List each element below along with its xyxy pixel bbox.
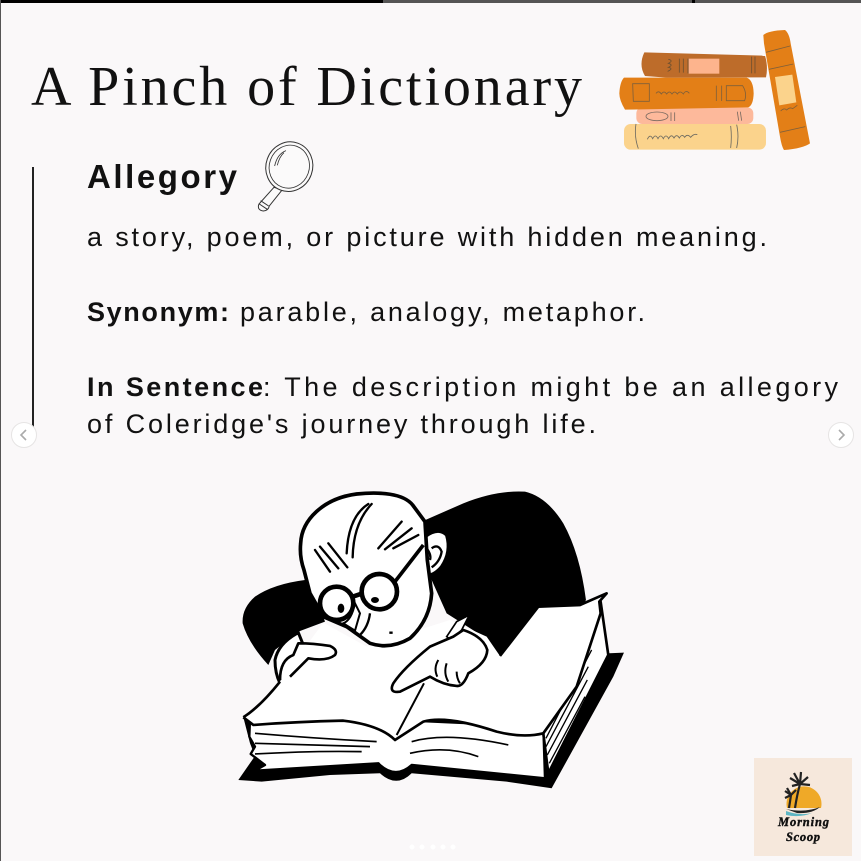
pen [447,615,469,640]
nose [343,603,360,631]
book page block [249,720,545,778]
heading: Allegory: Allegory [87,158,238,195]
logo: Morning Scoop [754,758,852,856]
book fore edge [543,602,608,773]
icon: stack of books [619,30,810,150]
centre fold [397,683,424,735]
illustration: man reading a book [238,491,624,788]
title: A Pinch of Dictionary [31,56,582,118]
page lines [255,733,508,777]
head [300,493,432,646]
definition text: a story, poem, or picture with hidden meaning. [87,222,767,252]
example sentence: In Sentence [87,372,263,402]
logo palm trees [785,772,810,808]
left shoulder [243,580,325,665]
page outlines [243,593,607,740]
book: leaning orange [763,30,810,150]
book: brown [641,52,767,78]
vertical rule [32,167,34,428]
synonym text: Synonym: [87,297,229,327]
icon: magnifying glass [258,135,320,211]
logo: Morning Scoop: Scoop [786,830,820,844]
book shadow [238,653,624,788]
left cuff [275,633,307,683]
hair strokes [315,504,418,572]
ear [425,531,448,575]
icon: previous arrow [12,422,36,448]
spectacles [320,545,423,620]
right arm [392,630,487,692]
book: orange [619,78,754,110]
book: peach [636,107,753,124]
carousel dots [410,844,456,850]
logo waves [786,807,820,813]
example sentence: : The description might be an allegory [263,372,838,402]
logo wordmark: Morning [777,815,829,829]
icon: next arrow [828,422,854,448]
open pages [243,593,607,740]
example sentence [87,372,838,439]
example sentence: of Coleridge's journey through life. [87,409,596,439]
logo sun [786,786,822,808]
eyes [371,597,379,603]
body [417,491,586,656]
left hand [280,643,336,680]
book: pale yellow [624,124,766,150]
synonym text: parable, analogy, metaphor. [240,297,645,327]
